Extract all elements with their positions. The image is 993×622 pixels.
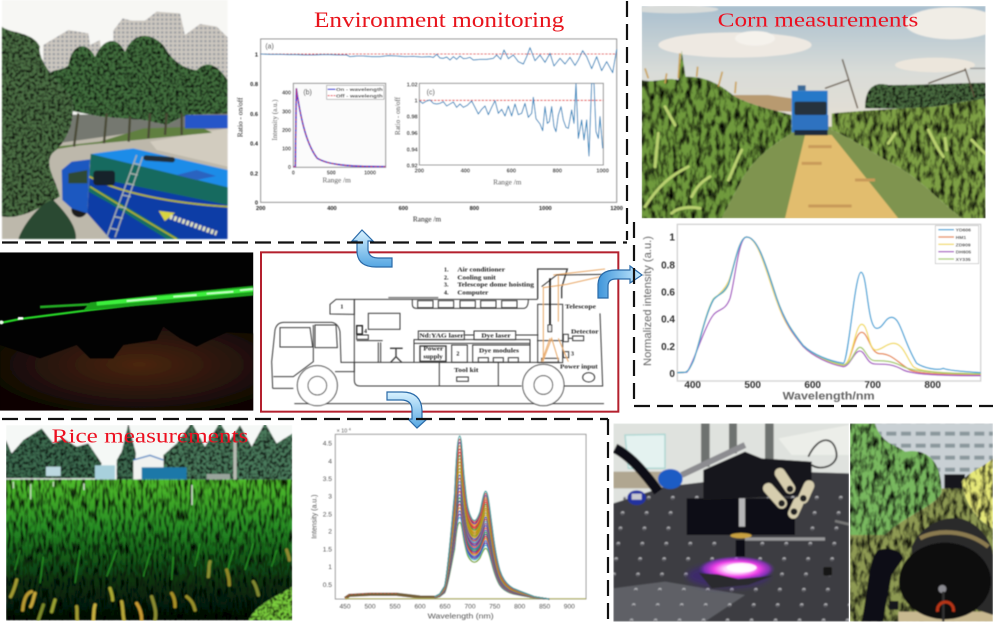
red frame [261, 252, 618, 412]
photo: laboratory optical table with purple laser spot [613, 423, 849, 622]
chart (b): intensity vs range inset: Intensity (a.u.) [271, 99, 279, 140]
schematic labels: Telescope dome hoisting [457, 283, 534, 289]
chart (b): intensity vs range inset: 1000 [364, 170, 376, 176]
schematic labels: Power [423, 347, 444, 353]
schematic labels: Power input [560, 365, 598, 371]
chart: rice fluorescence spectra: 600 [414, 604, 426, 611]
chart (a): ratio on/off over range: 0.8 [250, 82, 258, 88]
chart: rice fluorescence spectra: 800 [514, 604, 526, 611]
photo: lidar truck on campus road with high-rise buildings [2, 0, 228, 239]
truck outline drawing [272, 269, 604, 406]
chart (a): ratio on/off over range: Range /m [413, 214, 441, 223]
chart (a): ratio on/off over range: 0.2 [250, 171, 258, 177]
chart (a): ratio on/off over range: 1000 [539, 206, 552, 212]
chart: corn normalized intensity spectra [642, 224, 981, 402]
legend: HM1 [956, 235, 966, 241]
chart (b): intensity vs range inset: Range /m [323, 176, 351, 185]
panel: lidar truck schematic [261, 252, 618, 412]
chart (a): ratio on/off over range: 0 [255, 201, 258, 207]
schematic labels: Detector [571, 330, 599, 336]
chart (a): ratio on/off over range: 1200 [610, 206, 623, 212]
chart (c): ratio zoom inset: Ratio - on/off [394, 96, 402, 135]
chart (b): intensity vs range inset: 300 [282, 109, 291, 115]
chart (a): ratio on/off over range: 400 [327, 206, 337, 212]
chart: corn normalized intensity spectra: 0.8 [661, 260, 675, 271]
chart (c): ratio zoom inset: 0.92 [407, 163, 418, 169]
chart (c): ratio zoom inset: 400 [461, 169, 470, 175]
chart: rice fluorescence spectra [311, 426, 586, 621]
chart (a): ratio on/off over range: 600 [399, 206, 408, 212]
chart: rice fluorescence spectra: 2.5 [323, 511, 332, 518]
schematic labels [340, 268, 599, 374]
chart: rice fluorescence spectra: 850 [539, 604, 551, 611]
schematic labels: 1 [340, 304, 343, 310]
chart: corn normalized intensity spectra: Normalized intensity (a.u.) [642, 236, 654, 366]
chart: rice fluorescence spectra: 4.5 [323, 441, 332, 448]
heading: corn measurements: Corn measurements [718, 10, 919, 32]
chart (c): ratio zoom inset: 0.94 [407, 147, 419, 153]
chart: rice fluorescence spectra: 700 [464, 604, 476, 611]
schematic labels: 3 [571, 352, 574, 358]
schematic labels: Nd:YAG laser [419, 333, 464, 339]
chart (b): intensity vs range inset: 0 [292, 170, 295, 176]
chart (b): intensity vs range inset: On - wavelength [336, 87, 383, 93]
chart: corn normalized intensity spectra: 0 [669, 369, 675, 380]
chart: rice fluorescence spectra: × 10 [337, 429, 347, 435]
chart: rice fluorescence spectra: 0.5 [323, 582, 332, 589]
chart (b): intensity vs range inset: 0 [288, 165, 291, 171]
chart (c): ratio zoom inset: 800 [553, 169, 562, 175]
chart (a): ratio on/off over range: Ratio - on/off [236, 97, 245, 137]
chart (b): intensity vs range inset [271, 83, 386, 185]
schematic labels: supply [423, 354, 443, 360]
chart: corn normalized intensity spectra: 600 [804, 380, 821, 391]
chart: rice fluorescence spectra: Intensity (a.u.) [311, 495, 318, 539]
chart (a): ratio on/off over range: 200 [256, 206, 265, 212]
chart: corn normalized intensity spectra: 400 [684, 380, 701, 391]
photo: telescope pointing at corn plants [850, 423, 993, 622]
chart (a): ratio on/off over range: (a) [265, 44, 274, 51]
chart: corn normalized intensity spectra: 0.6 [661, 287, 675, 298]
chart: corn normalized intensity spectra: 1 [669, 232, 675, 243]
legend: DH605 [956, 250, 971, 256]
legend: XY335 [956, 257, 971, 263]
laser and light rays [542, 269, 605, 362]
chart (c): ratio zoom inset: 0.96 [407, 131, 418, 137]
heading: rice measurements: Rice measurements [52, 425, 249, 447]
schematic labels: Cooling unit [457, 275, 496, 281]
chart: rice fluorescence spectra: 4 [349, 426, 352, 431]
schematic labels: Dye modules [479, 349, 520, 355]
legend: YD606 [956, 228, 971, 234]
chart (b): intensity vs range inset: 500 [327, 170, 336, 176]
arrow: from schematic down to rice measurements [387, 392, 427, 428]
chart: rice fluorescence spectra: 3.5 [323, 476, 332, 483]
chart: rice fluorescence spectra: 500 [364, 604, 376, 611]
chart: rice fluorescence spectra: 750 [489, 604, 501, 611]
chart: rice fluorescence spectra: 550 [389, 604, 401, 611]
chart (a): ratio on/off over range [236, 39, 623, 223]
schematic labels: Dye laser [481, 333, 511, 339]
chart (c): ratio zoom inset: 200 [415, 169, 424, 175]
chart (a): ratio on/off over range: 800 [470, 206, 479, 212]
schematic labels: Tool kit [454, 368, 478, 374]
chart (b): intensity vs range inset: 200 [282, 128, 291, 134]
schematic labels: 2. [444, 275, 449, 281]
chart (c): ratio zoom inset: 0.98 [407, 115, 418, 121]
legend: ZD909 [956, 242, 971, 248]
schematic labels: Air conditioner [457, 268, 505, 274]
chart (b): intensity vs range inset: Off - wavelength [336, 93, 383, 99]
chart: corn normalized intensity spectra: 800 [924, 380, 941, 391]
schematic labels: Telescope [565, 304, 596, 310]
chart (c): ratio zoom inset: (c) [427, 89, 435, 96]
chart (b): intensity vs range inset: 100 [282, 146, 291, 152]
arrow: from schematic right to corn measurements [598, 266, 642, 298]
chart: corn normalized intensity spectra: 0.4 [661, 315, 675, 326]
chart: rice fluorescence spectra: 3 [328, 493, 332, 500]
chart (b): intensity vs range inset: (b) [303, 90, 312, 97]
chart (c): ratio zoom inset: 1 [415, 99, 418, 105]
heading: environment monitoring: Environment monitoring [314, 7, 564, 32]
chart: corn normalized intensity spectra: Wavelength/nm [783, 390, 875, 402]
chart: rice fluorescence spectra: 650 [439, 604, 451, 611]
chart (a): ratio on/off over range: 0.6 [250, 112, 258, 118]
schematic labels: 3. [444, 283, 449, 289]
schematic labels: 4. [444, 290, 449, 296]
chart: rice fluorescence spectra: Wavelength (nm) [428, 612, 494, 621]
photo: rice paddy field with truck in background [6, 422, 292, 621]
chart: rice fluorescence spectra: 1.5 [323, 547, 332, 554]
chart: corn normalized intensity spectra: 500 [744, 380, 761, 391]
chart: rice fluorescence spectra: 900 [564, 604, 575, 611]
chart: rice fluorescence spectra: 2 [328, 529, 332, 536]
chart: rice fluorescence spectra: 1 [328, 564, 332, 571]
chart (a): ratio on/off over range: 1 [255, 53, 258, 59]
schematic labels: 2 [456, 352, 459, 358]
chart (c): ratio zoom inset: 1000 [596, 169, 609, 175]
chart (b): intensity vs range inset: 400 [282, 91, 291, 97]
chart: rice fluorescence spectra: 450 [339, 604, 351, 611]
chart: corn normalized intensity spectra: 0.2 [661, 342, 675, 353]
chart (a): ratio on/off over range: 0.4 [250, 141, 259, 147]
schematic labels: Computer [457, 290, 489, 296]
schematic labels: 1. [444, 268, 449, 274]
photo: blue truck on dirt road between corn fields [632, 5, 993, 218]
chart: corn normalized intensity spectra: 700 [864, 380, 881, 391]
schematic labels: 4 [364, 329, 367, 335]
arrow: from schematic up to environment monitoring [352, 230, 392, 267]
chart panel: environment monitoring [236, 7, 623, 223]
chart (c): ratio zoom inset: 1.02 [407, 83, 418, 89]
chart (c): ratio zoom inset [394, 83, 609, 187]
chart: rice fluorescence spectra: 4 [328, 459, 332, 466]
photo: green laser beam at night [0, 252, 253, 411]
chart (c): ratio zoom inset: 600 [507, 169, 516, 175]
legend [935, 226, 979, 264]
chart (c): ratio zoom inset: Range /m [493, 178, 522, 187]
